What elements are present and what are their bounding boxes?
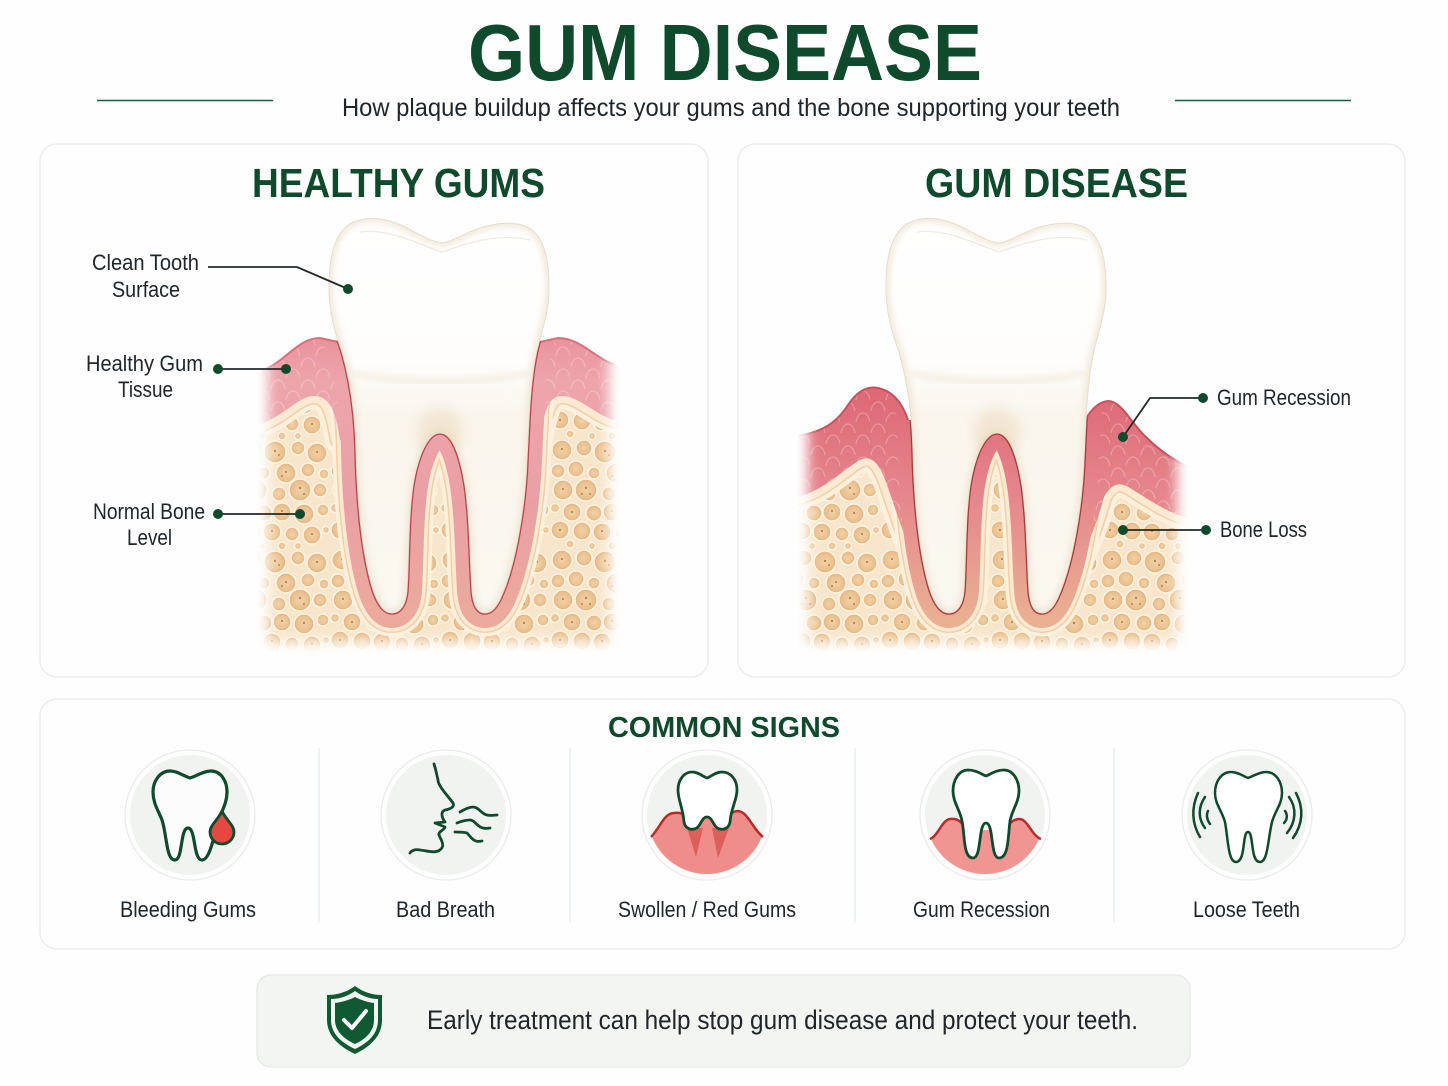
label: bone loss [1118, 517, 1307, 542]
label: Swollen / Red Gums [618, 897, 796, 922]
callout: early treatment [257, 975, 1190, 1067]
title: GUM DISEASE [468, 8, 982, 97]
label: Bad Breath [396, 897, 495, 922]
heading: common signs: COMMON SIGNS [608, 712, 840, 744]
icon: shield with check [327, 986, 382, 1054]
label: healthy gum tissue: Tissue [118, 377, 173, 402]
label: normal bone level: Normal Bone [93, 499, 205, 524]
panel: healthy gums [40, 144, 708, 677]
label: bone loss: Bone Loss [1220, 517, 1307, 542]
label: clean tooth surface [92, 250, 353, 302]
tooth [329, 218, 549, 613]
panel: common signs [40, 699, 1405, 949]
sign: bleeding gums [120, 750, 256, 922]
icon: face profile with breath [381, 750, 511, 880]
icon: wobbling tooth [1182, 750, 1312, 880]
icon: tooth in swollen gums [640, 750, 775, 880]
label: clean tooth surface: Clean Tooth [92, 250, 199, 275]
heading: gum disease: GUM DISEASE [925, 160, 1188, 206]
label: gum recession: Gum Recession [1217, 385, 1351, 410]
label: Bleeding Gums [120, 897, 256, 922]
sign: gum recession [913, 750, 1050, 922]
label: clean tooth surface: Surface [112, 277, 180, 302]
callout text: Early treatment can help stop gum disease and protect your teeth. [427, 1005, 1138, 1035]
label: healthy gum tissue [86, 351, 291, 402]
sign: bad breath [381, 750, 511, 922]
icon: tooth with receded gums [920, 750, 1050, 880]
label: normal bone level [93, 499, 305, 550]
label: gum recession [1118, 385, 1351, 442]
sign: swollen / red gums [618, 750, 796, 922]
label: Loose Teeth [1193, 897, 1300, 922]
subtitle: How plaque buildup affects your gums and the bone supporting your teeth [342, 94, 1120, 122]
heading: healthy gums: HEALTHY GUMS [252, 160, 545, 206]
illustration: healthy tooth, gums and bone [258, 218, 620, 654]
illustration: diseased tooth, receded gums and bone [798, 218, 1188, 654]
tooth [886, 218, 1106, 613]
label: Gum Recession [913, 897, 1050, 922]
label: normal bone level: Level [127, 525, 172, 550]
panel: gum disease [738, 144, 1405, 677]
icon: tooth with blood drop [125, 750, 255, 880]
sign: loose teeth [1182, 750, 1312, 922]
label: healthy gum tissue: Healthy Gum [86, 351, 203, 376]
